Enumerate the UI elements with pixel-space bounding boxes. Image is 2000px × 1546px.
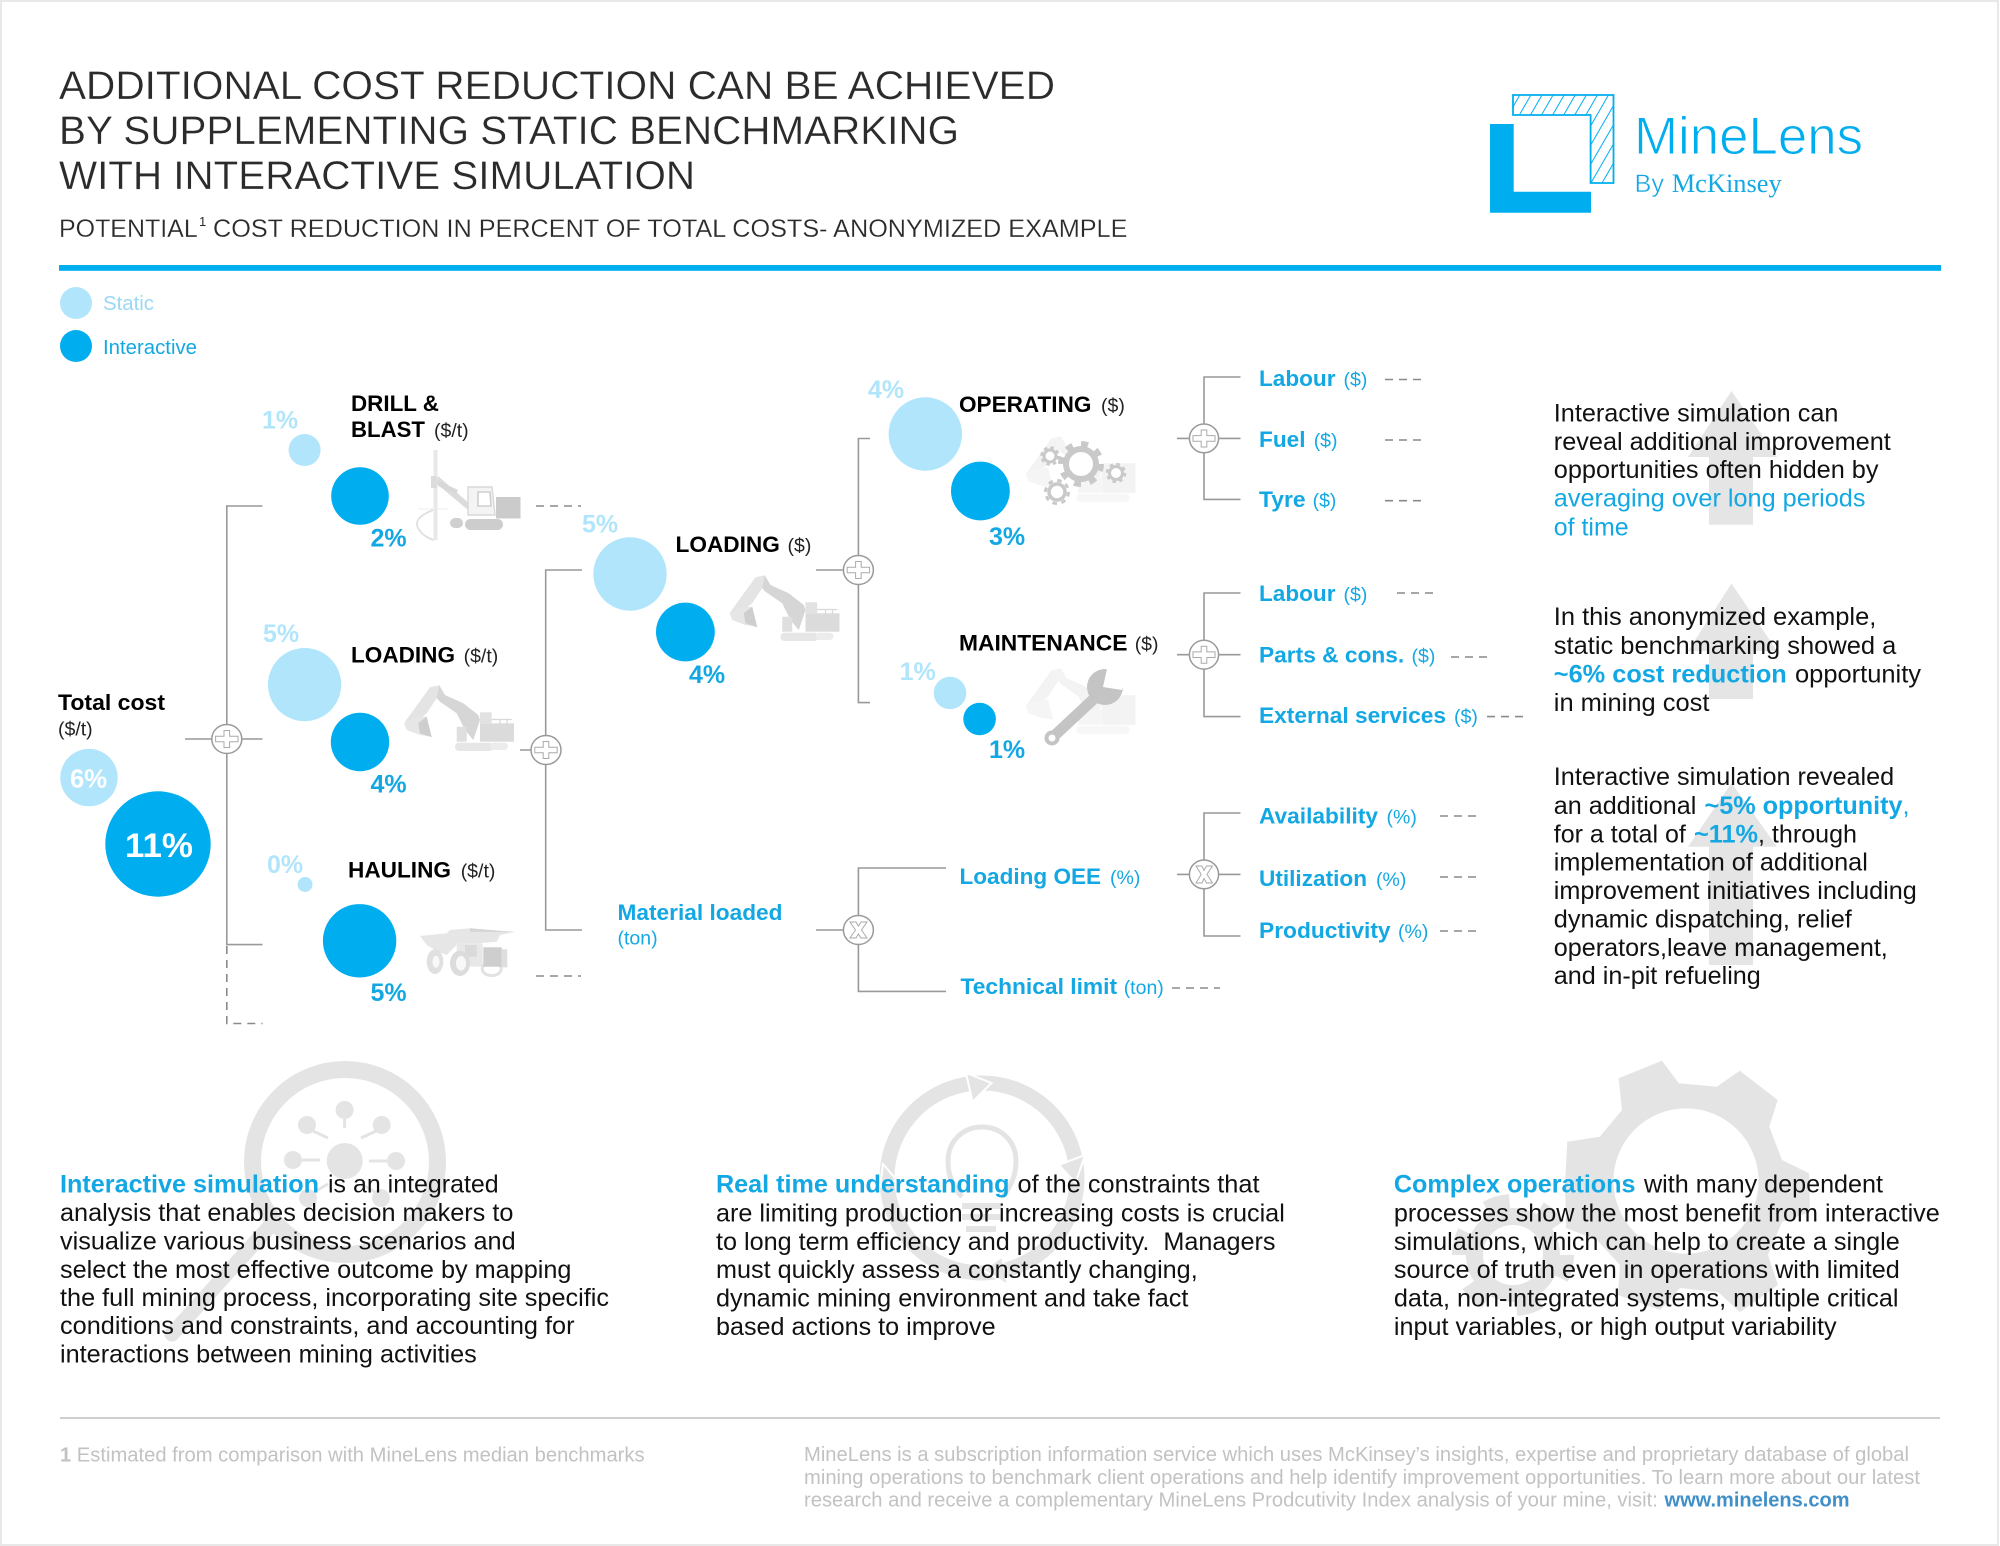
callout: additional opportunity: operators,leave management, [1554, 934, 1888, 962]
hauling node: 5% [370, 979, 407, 1007]
maintenance node: 1% [900, 658, 936, 686]
text: real time understanding: based actions to improve [716, 1313, 996, 1341]
operating cost drivers: Tyre [1259, 487, 1306, 512]
text: interactive simulation: Interactive simulation [60, 1171, 319, 1199]
text: complex operations: with many dependent [1643, 1171, 1883, 1199]
callout: interactive simulation can reveal: Interactive simulation can [1554, 400, 1838, 428]
icon: drill rig [417, 450, 520, 540]
about MineLens: research and receive a complementary MineLens Prodcutivity Index analysis of your mine, visit: [804, 1490, 1658, 1512]
maintenance node: 1% [989, 736, 1025, 764]
maintenance node: MAINTENANCE [959, 630, 1127, 656]
text: interactive simulation: visualize various business scenarios and [60, 1227, 516, 1255]
callout: interactive simulation can reveal [1554, 400, 1891, 542]
title [59, 63, 1055, 198]
about MineLens: www.minelens.com [1663, 1490, 1850, 1512]
text: interactive simulation: conditions and constraints, and accounting for [60, 1312, 574, 1340]
text: complex operations: source of truth even in operations with limited [1394, 1256, 1900, 1284]
hauling node: 0% [267, 851, 303, 879]
drill and blast node: BLAST [351, 417, 425, 442]
operating node: ($) [1101, 395, 1125, 417]
text: interactive simulation: select the most effective outcome by mapping [60, 1256, 571, 1284]
title: WITH INTERACTIVE SIMULATION [59, 153, 695, 198]
logo: MineLens by McKinsey: McKinsey [1672, 168, 1782, 198]
callout: static benchmarking: opportunity [1795, 660, 1921, 688]
maintenance cost drivers: External services [1259, 703, 1446, 728]
title: ADDITIONAL COST REDUCTION CAN BE ACHIEVED [59, 63, 1055, 108]
operator: multiply, OEE [1189, 860, 1219, 889]
loading per tonne node: ($/t) [464, 646, 498, 668]
arrow: background 1 [1688, 391, 1777, 525]
callout: additional opportunity: ~5% opportunity [1704, 792, 1902, 820]
maintenance node [900, 630, 1159, 764]
callout: interactive simulation can reveal: reveal additional improvement [1554, 428, 1891, 456]
total cost node: 6% [70, 766, 107, 794]
callout: additional opportunity: , [1902, 792, 1910, 820]
maintenance cost drivers [1259, 581, 1478, 728]
callout: static benchmarking: ~6% cost reduction [1554, 660, 1787, 688]
operator: plus, loading [531, 736, 561, 764]
legend: Static [103, 293, 154, 315]
operating node [868, 376, 1125, 551]
loading cost node: ($) [788, 535, 811, 557]
maintenance cost drivers: ($) [1412, 646, 1435, 668]
text: complex operations: data, non-integrated systems, multiple critical [1394, 1285, 1898, 1313]
icon: haul truck [420, 928, 515, 976]
loading OEE label: (%) [1110, 867, 1140, 889]
subtitle: POTENTIAL [59, 215, 198, 243]
text: real time understanding: Real time understanding [716, 1171, 1010, 1199]
text: complex operations [1394, 1171, 1940, 1341]
drill and blast node: 2% [370, 524, 407, 552]
text: complex operations: processes show the most benefit from interactive [1394, 1200, 1940, 1228]
title: BY SUPPLEMENTING STATIC BENCHMARKING [59, 108, 959, 153]
icon: cycle arrows with light bulb [880, 1073, 1085, 1285]
footnote: 1 [60, 1445, 71, 1467]
text: complex operations: Complex operations [1394, 1171, 1636, 1199]
loading cost node [582, 511, 811, 689]
arrow: background 2 [1688, 584, 1777, 699]
operating cost drivers: Labour [1259, 366, 1336, 391]
OEE drivers: Availability [1259, 804, 1379, 828]
loading per tonne node [263, 620, 498, 798]
text: interactive simulation [60, 1171, 609, 1369]
operator: plus, maintenance [1189, 640, 1219, 669]
material loaded node: (ton) [618, 928, 658, 950]
operating cost drivers: ($) [1314, 430, 1338, 452]
callout: interactive simulation can reveal: of time [1554, 514, 1629, 542]
operating node: OPERATING [959, 392, 1091, 417]
loading per tonne node: 4% [370, 770, 407, 798]
drill and blast node: ($/t) [434, 420, 469, 442]
callout: static benchmarking: in mining cost [1554, 689, 1709, 717]
operator: multiply, material loaded [843, 916, 873, 944]
icon: wrench [1026, 664, 1136, 744]
callout: static benchmarking: In this anonymized example, [1554, 603, 1876, 631]
technical limit label: Technical limit [960, 974, 1118, 999]
legend: Interactive [103, 337, 197, 359]
total cost node: Total cost [58, 690, 166, 715]
operator: plus, operating [1189, 424, 1219, 453]
text: complex operations: simulations, which can help to create a single [1394, 1228, 1900, 1256]
text: real time understanding: are limiting production or increasing costs is crucial [716, 1200, 1285, 1228]
callout: additional opportunity: an additional [1554, 792, 1696, 820]
OEE drivers: (%) [1398, 921, 1428, 943]
total cost node: ($/t) [58, 718, 93, 740]
callout: additional opportunity: dynamic dispatching, relief [1554, 905, 1853, 933]
operator: plus, total cost [212, 724, 242, 754]
callout: interactive simulation can reveal: opportunities often hidden by [1554, 456, 1879, 484]
total cost node [58, 690, 211, 897]
text: complex operations: input variables, or high output variability [1394, 1313, 1837, 1341]
operating cost drivers: Fuel [1259, 427, 1306, 452]
operating node: 4% [868, 376, 904, 404]
loading cost node: LOADING [676, 532, 780, 557]
loading OEE label: Loading OEE [960, 864, 1101, 889]
callout: additional opportunity: improvement initiatives including [1554, 877, 1917, 905]
OEE drivers: (%) [1376, 869, 1406, 891]
maintenance cost drivers: Labour [1259, 581, 1336, 606]
callout: additional opportunity [1554, 763, 1917, 990]
callout: additional opportunity: , through [1758, 820, 1857, 848]
text: interactive simulation: analysis that enables decision makers to [60, 1199, 513, 1227]
loading cost node: 4% [689, 661, 725, 689]
icon: excavator [404, 685, 514, 751]
text: real time understanding [716, 1171, 1285, 1341]
hauling node: HAULING [348, 857, 451, 882]
callout: additional opportunity: implementation of additional [1554, 848, 1868, 876]
OEE drivers: Utilization [1259, 866, 1367, 891]
logo: MineLens by McKinsey [1490, 95, 1863, 213]
operating node: 3% [989, 523, 1025, 551]
arrow: background 3 [1688, 783, 1777, 965]
OEE drivers: Productivity [1259, 918, 1391, 943]
loading per tonne node: LOADING [351, 643, 455, 668]
material loaded node [618, 900, 782, 950]
callout: static benchmarking [1554, 603, 1921, 717]
logo: MineLens by McKinsey: By [1634, 170, 1664, 198]
subtitle: COST REDUCTION IN PERCENT OF TOTAL COSTS- ANONYMIZED EXAMPLE [213, 215, 1127, 243]
material loaded node: Material loaded [618, 900, 782, 925]
OEE drivers [1259, 804, 1428, 943]
operating cost drivers: ($) [1313, 490, 1336, 512]
icon: gears [1026, 436, 1136, 504]
drill and blast node: 1% [262, 406, 298, 434]
logo: MineLens by McKinsey: MineLens [1634, 107, 1863, 166]
maintenance cost drivers: ($) [1454, 706, 1478, 728]
callout: interactive simulation can reveal: averaging over long periods [1554, 485, 1866, 513]
text: real time understanding: to long term efficiency and productivity. Managers [716, 1228, 1276, 1256]
text: interactive simulation: the full mining process, incorporating site specific [60, 1284, 609, 1312]
text: real time understanding: dynamic mining environment and take fact [716, 1285, 1188, 1313]
hauling node: ($/t) [461, 860, 495, 882]
icon: magnifying glass with network [172, 1070, 438, 1334]
callout: additional opportunity: ~11% [1694, 820, 1758, 848]
about MineLens: MineLens is a subscription information service which uses McKinsey’s insights, expertise and proprietary database of global [804, 1444, 1909, 1466]
drill and blast node: DRILL & [351, 391, 439, 416]
tree connector lines [185, 377, 1524, 1024]
icon: gears [1460, 1061, 1810, 1312]
technical limit label: (ton) [1124, 977, 1164, 999]
maintenance cost drivers: Parts & cons. [1259, 643, 1404, 668]
text: interactive simulation: is an integrated [328, 1171, 499, 1199]
icon: excavator [730, 575, 840, 641]
hauling node [267, 851, 495, 1007]
legend [60, 287, 197, 362]
OEE drivers: (%) [1386, 806, 1417, 828]
maintenance cost drivers: ($) [1344, 584, 1367, 606]
text: interactive simulation: interactions between mining activities [60, 1341, 477, 1369]
operator: plus, loading cost [843, 556, 873, 584]
operating cost drivers [1259, 366, 1367, 512]
about MineLens: mining operations to benchmark client operations and help identify improvement opportunities. To learn more about our latest [804, 1467, 1920, 1489]
subtitle: 1 [199, 214, 206, 229]
callout: static benchmarking: static benchmarking showed a [1554, 632, 1897, 660]
loading cost node: 5% [582, 511, 618, 539]
about MineLens [804, 1444, 1920, 1512]
maintenance node: ($) [1135, 634, 1159, 656]
footnote: Estimated from comparison with MineLens median benchmarks [77, 1445, 645, 1467]
text: real time understanding: must quickly assess a constantly changing, [716, 1256, 1198, 1284]
callout: additional opportunity: for a total of [1554, 820, 1687, 848]
callout: additional opportunity: Interactive simulation revealed [1554, 763, 1894, 791]
callout: additional opportunity: and in-pit refueling [1554, 962, 1761, 990]
operating cost drivers: ($) [1344, 369, 1367, 391]
drill and blast node [262, 391, 469, 552]
text: real time understanding: of the constraints that [1018, 1171, 1260, 1199]
total cost node: 11% [125, 827, 193, 865]
loading per tonne node: 5% [263, 620, 299, 648]
